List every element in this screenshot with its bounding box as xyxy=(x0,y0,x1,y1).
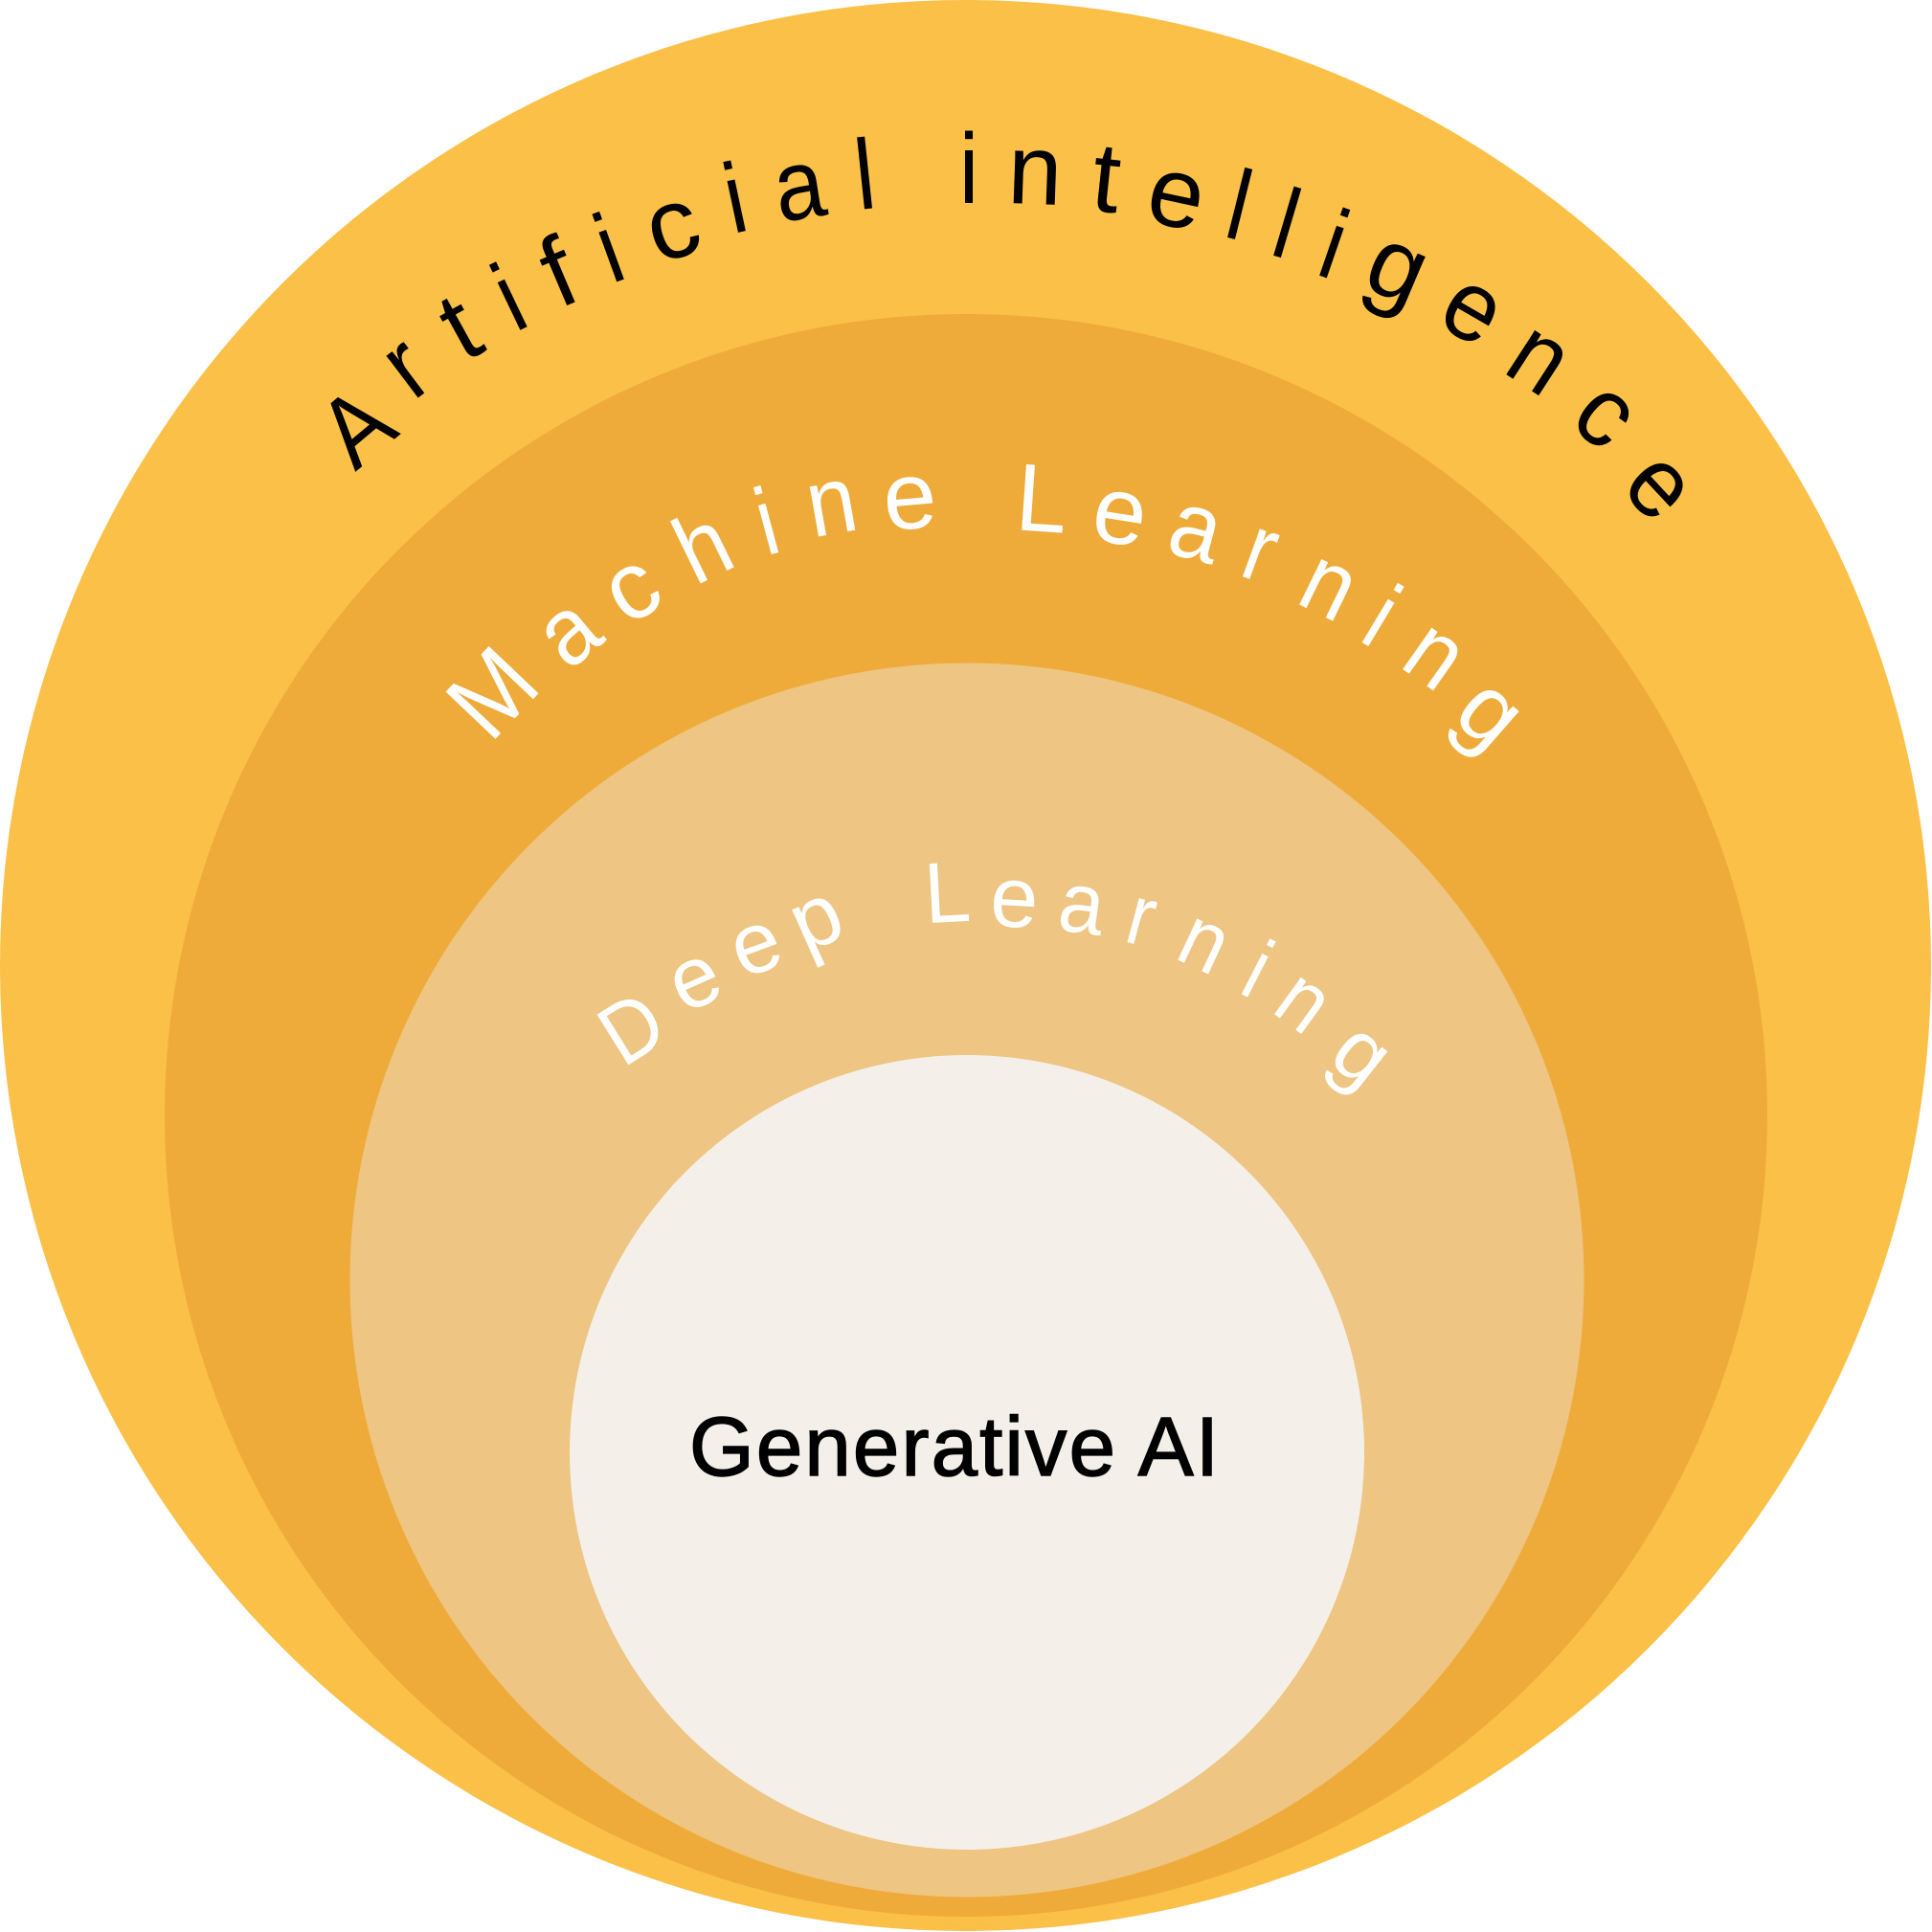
curved heading: Deep Learning: n xyxy=(1259,949,1351,1052)
curved heading: Artificial intelligence: i xyxy=(959,113,978,224)
circle: machine learning xyxy=(165,314,1767,1917)
curved heading: Deep Learning: i xyxy=(1228,922,1288,1016)
curved heading: Machine Learning xyxy=(426,440,1547,770)
curved heading: Deep Learning: D xyxy=(582,973,682,1085)
curved heading: Deep Learning: L xyxy=(922,842,973,942)
curved heading: Artificial intelligence: t xyxy=(420,272,499,382)
circle: deep learning xyxy=(350,663,1584,1898)
curved heading: Artificial intelligence: A xyxy=(297,364,415,488)
curved heading: Machine Learning: r xyxy=(1230,493,1293,603)
curved heading: Machine Learning: i xyxy=(1347,566,1418,666)
curved heading: Artificial intelligence: n xyxy=(1489,297,1592,417)
curved heading: Deep Learning: g xyxy=(1314,1001,1411,1106)
curved heading: Machine Learning: a xyxy=(513,573,620,687)
curved heading: Machine Learning: a xyxy=(1158,468,1235,585)
curved heading: Artificial intelligence: c xyxy=(1554,355,1661,470)
curved heading: Machine Learning: e xyxy=(1086,454,1156,569)
curved heading: Artificial intelligence: t xyxy=(1087,122,1126,235)
curved heading: Artificial intelligence: g xyxy=(1351,204,1446,327)
curved heading: Artificial intelligence: n xyxy=(1006,113,1065,226)
curved heading: Artificial intelligence: l xyxy=(1262,168,1313,280)
heading: Generative AI: Generative AI xyxy=(689,1401,1219,1494)
curved heading: Deep Learning: e xyxy=(716,890,794,997)
curved heading: Machine Learning: g xyxy=(1437,654,1547,770)
curved heading: Artificial intelligence: i xyxy=(713,141,756,255)
curved heading: Artificial intelligence: i xyxy=(580,192,637,303)
curved heading: Machine Learning: n xyxy=(1386,595,1487,711)
circle: generative AI xyxy=(570,1055,1364,1850)
curved heading: Artificial intelligence: f xyxy=(524,215,594,329)
curved heading: Artificial intelligence: e xyxy=(1424,245,1524,368)
curved heading: Deep Learning: r xyxy=(1117,865,1167,965)
curved heading: Artificial intelligence: a xyxy=(765,124,833,243)
curved heading: Artificial intelligence: l xyxy=(1217,148,1263,261)
curved heading: Deep Learning: a xyxy=(1053,852,1112,955)
curved heading: Machine Learning: c xyxy=(582,528,679,645)
curved heading: Machine Learning: n xyxy=(798,444,865,558)
curved heading: Machine Learning: n xyxy=(1285,525,1376,642)
curved heading: Deep Learning: e xyxy=(653,925,735,1031)
curved heading: Artificial intelligence: e xyxy=(1138,133,1216,254)
curved heading: Deep Learning: p xyxy=(775,865,857,971)
curved heading: Artificial intelligence: i xyxy=(1307,188,1361,300)
curved heading: Artificial intelligence: e xyxy=(1604,427,1720,541)
curved heading: Machine Learning: i xyxy=(744,467,789,575)
curved heading: Artificial intelligence: r xyxy=(359,311,450,418)
curved heading: Artificial intelligence: l xyxy=(849,118,880,231)
curved heading: Machine Learning: e xyxy=(878,440,941,551)
curved heading: Deep Learning: e xyxy=(988,849,1041,947)
curved heading: Deep Learning: n xyxy=(1165,888,1246,994)
curved heading: Artificial intelligence xyxy=(297,113,1720,541)
curved heading: Deep Learning xyxy=(582,842,1411,1106)
curved heading: Machine Learning: M xyxy=(426,627,560,759)
curved heading: Machine Learning: h xyxy=(658,487,749,605)
curved heading: Artificial intelligence: c xyxy=(631,164,712,285)
curved heading: Machine Learning: L xyxy=(1013,443,1071,553)
curved heading: Artificial intelligence: i xyxy=(476,242,542,351)
